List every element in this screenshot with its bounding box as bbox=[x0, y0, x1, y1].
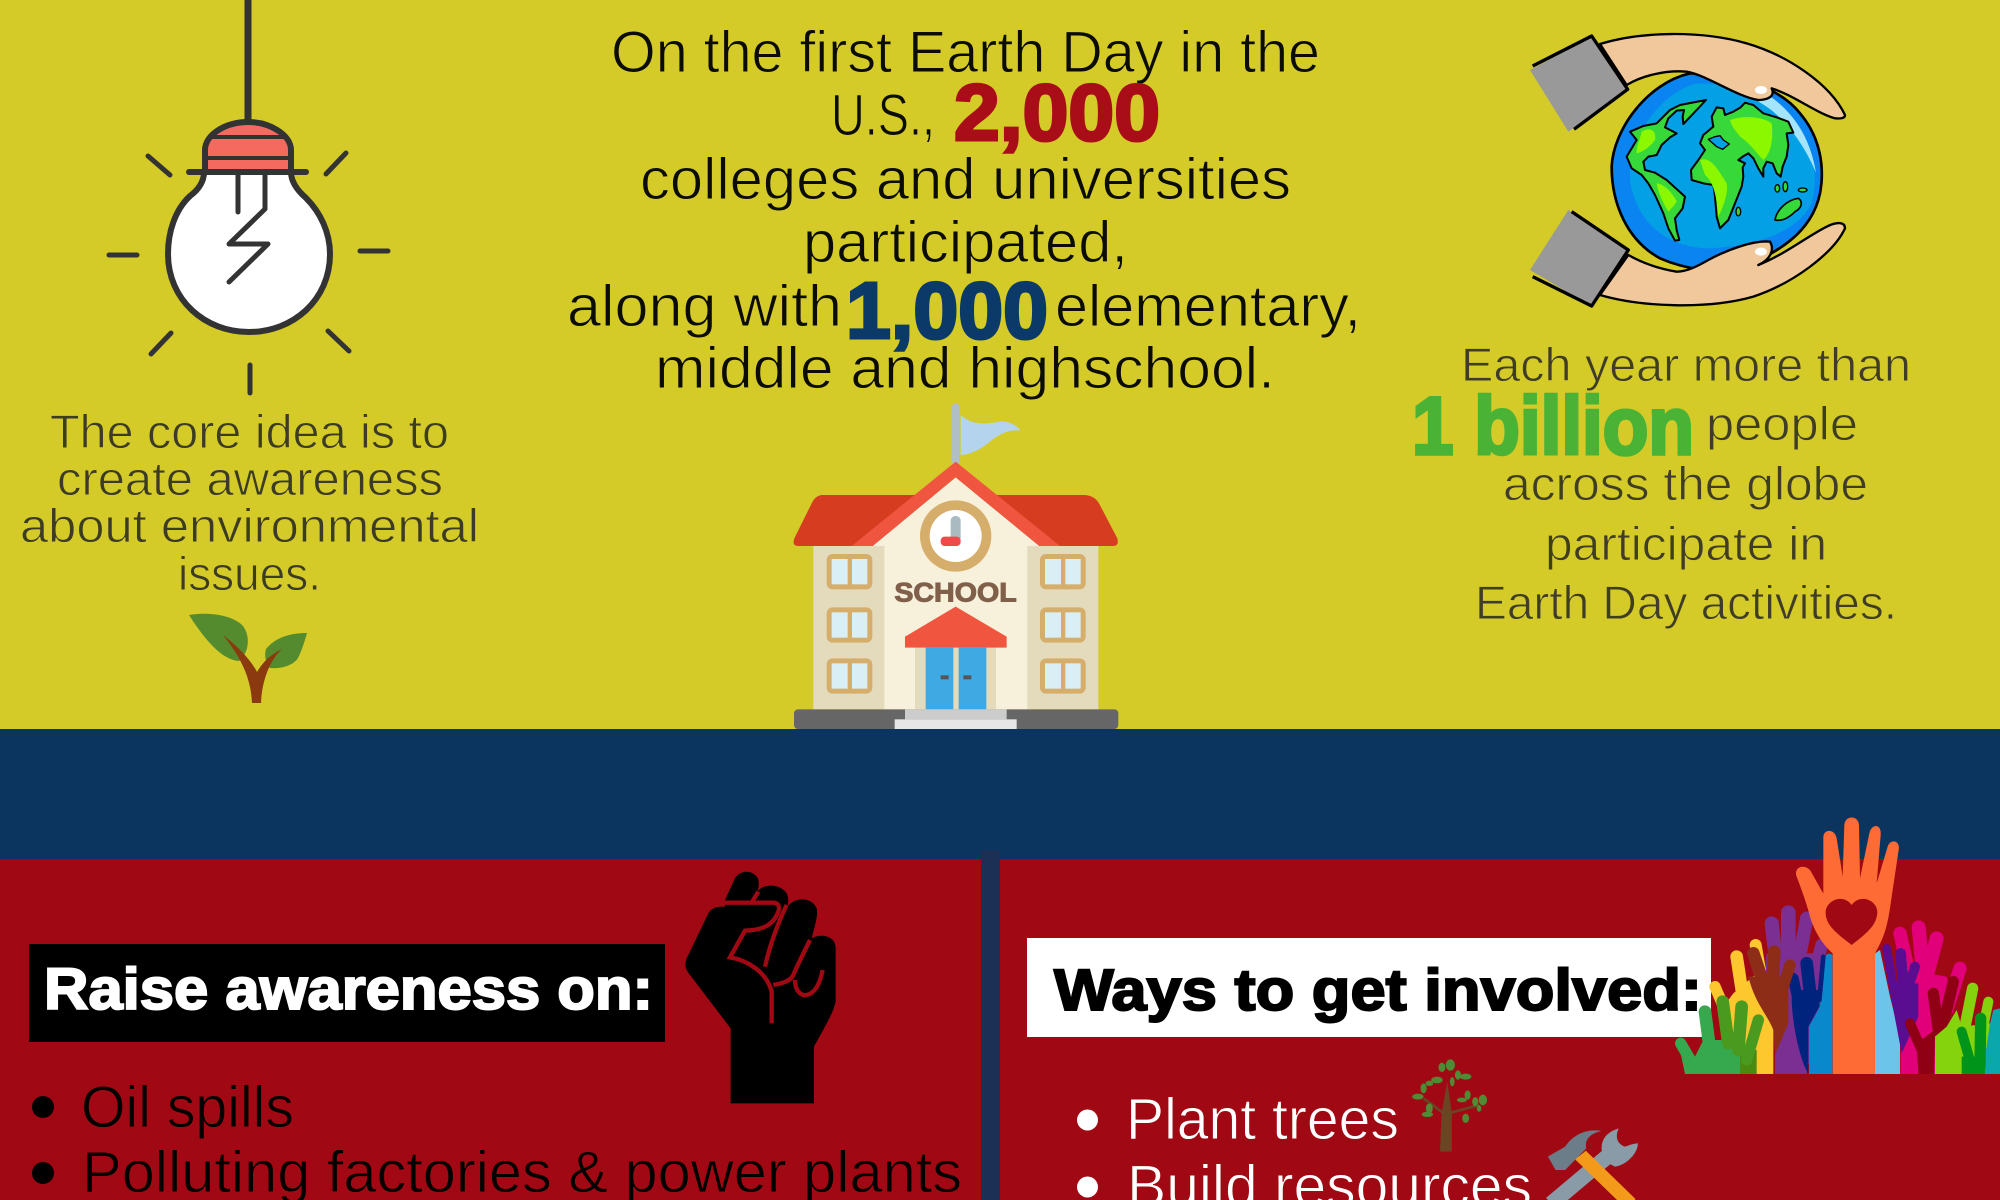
statistic: 1 billion: 1 billion bbox=[1412, 381, 1694, 472]
icon: hanging light bulb bbox=[109, 0, 388, 393]
text block: core idea: create awareness bbox=[57, 452, 443, 505]
panel: ways to get involved background bbox=[1000, 859, 2000, 1200]
icon: sprout bbox=[189, 614, 307, 703]
text block: core idea: issues. bbox=[178, 547, 321, 600]
panel: yellow facts section bbox=[0, 0, 2000, 729]
icon: school building: SCHOOL bbox=[894, 578, 1017, 608]
panel: raise awareness background bbox=[0, 859, 981, 1200]
text block: first Earth Day: On the first Earth Day in the bbox=[611, 20, 1320, 85]
icon: raised fist bbox=[685, 872, 836, 1103]
text block: one billion people bbox=[1412, 338, 1911, 629]
navy band bbox=[0, 729, 2000, 859]
globe bbox=[1612, 73, 1822, 271]
text block: first Earth Day: middle and highschool. bbox=[655, 336, 1275, 401]
statistic: 1,000: 1,000 bbox=[846, 266, 1048, 355]
icon: tree bbox=[1412, 1059, 1487, 1152]
icon: school building bbox=[794, 404, 1118, 729]
hand: top bbox=[1530, 34, 1845, 132]
icon: hammer and wrench bbox=[1548, 1128, 1638, 1200]
text block: first Earth Day: U.S., bbox=[831, 83, 935, 148]
text block: one billion people: across the globe bbox=[1503, 457, 1868, 510]
text block: core idea: The core idea is to bbox=[50, 405, 449, 458]
text block: core idea: about environmental bbox=[20, 499, 479, 552]
hand: bottom bbox=[1530, 210, 1845, 307]
text block: core idea bbox=[20, 405, 479, 600]
heart bbox=[1826, 899, 1877, 945]
text block: one billion people: Earth Day activities. bbox=[1475, 576, 1897, 629]
main orange hand bbox=[1796, 817, 1899, 1074]
list: ways to get involved items: Plant trees bbox=[1126, 1087, 1399, 1152]
text block: one billion people: participate in bbox=[1545, 517, 1827, 570]
text block: one billion people: Each year more than bbox=[1461, 338, 1911, 391]
list: raise awareness items: Oil spills bbox=[81, 1075, 294, 1140]
icon: raised colourful hands bbox=[1680, 817, 2000, 1074]
text block: first Earth Day: participated, bbox=[803, 210, 1128, 275]
text block: first Earth Day: elementary, bbox=[1055, 274, 1361, 339]
text block: first Earth Day bbox=[567, 20, 1361, 401]
statistic: 2,000: 2,000 bbox=[954, 68, 1160, 157]
list: raise awareness items bbox=[32, 1075, 962, 1200]
icon: hands holding globe bbox=[1530, 34, 1845, 307]
heading: ways to get involved: Ways to get involved: bbox=[1054, 958, 1702, 1023]
heading: ways to get involved bbox=[1027, 938, 1711, 1037]
heading: raise awareness bbox=[29, 944, 665, 1042]
list: ways to get involved items bbox=[1077, 1087, 1532, 1200]
column divider bbox=[981, 850, 1000, 1200]
text block: first Earth Day: colleges and universities bbox=[640, 147, 1291, 212]
text block: one billion people: people bbox=[1706, 397, 1858, 450]
text block: first Earth Day: along with bbox=[567, 274, 842, 339]
heading: raise awareness: Raise awareness on: bbox=[44, 957, 653, 1022]
